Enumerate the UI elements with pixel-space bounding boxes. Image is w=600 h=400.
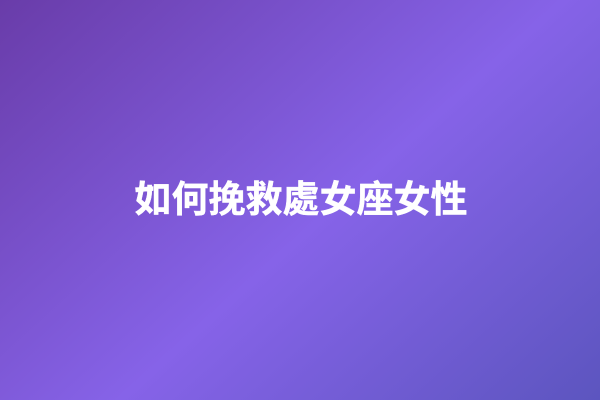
title: 如何挽救處女座女性 bbox=[134, 179, 468, 220]
